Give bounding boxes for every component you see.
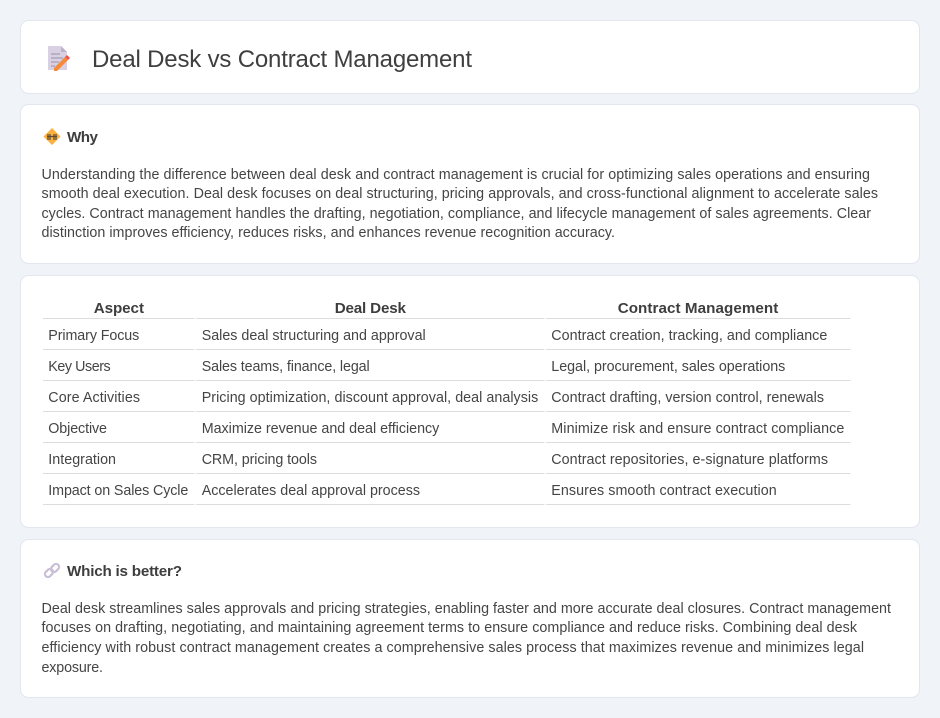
row: integration: Contract repositories, e-signature platforms bbox=[551, 452, 828, 468]
row: impact on sales cycle: Impact on Sales Cycle bbox=[48, 483, 188, 499]
row: key users: Key Users bbox=[48, 359, 111, 375]
row: integration bbox=[48, 452, 828, 468]
heading: why: Why bbox=[67, 129, 99, 146]
row: key users bbox=[48, 359, 785, 375]
row: key users: Sales teams, finance, legal bbox=[202, 359, 370, 375]
text block: verdict bbox=[42, 601, 891, 676]
row: core activities: Contract drafting, version control, renewals bbox=[551, 390, 824, 406]
table header: Aspect bbox=[94, 300, 144, 317]
text block: why explanation: Understanding the difference between deal desk and contract management is crucial for optimizing sales operations and ensuring bbox=[42, 167, 870, 183]
row: impact on sales cycle: Accelerates deal approval process bbox=[202, 483, 420, 499]
panel: comparison table bbox=[20, 276, 920, 528]
text block: verdict: efficiency with robust contract management creates a comprehensive sales process that maximizes revenue and minimizes legal bbox=[42, 640, 864, 656]
icon: warning diamond bbox=[44, 128, 60, 145]
table header: Contract Management bbox=[618, 300, 778, 317]
panel: why bbox=[20, 104, 920, 264]
text block: verdict: focuses on drafting, negotiating, and maintaining agreement terms to ensure compliance and reduce risks. Combining deal desk bbox=[42, 620, 858, 636]
row: objective: Maximize revenue and deal efficiency bbox=[202, 421, 440, 437]
icon: memo with pencil bbox=[48, 46, 70, 71]
row: impact on sales cycle bbox=[48, 483, 777, 499]
icon: link bbox=[44, 563, 60, 578]
panel: header bbox=[20, 20, 920, 94]
table header bbox=[94, 300, 778, 317]
text block: verdict: Deal desk streamlines sales approvals and pricing strategies, enabling faster and more accurate deal closures. Contract management bbox=[42, 601, 891, 617]
row: key users: Legal, procurement, sales operations bbox=[551, 359, 785, 375]
row: core activities: Pricing optimization, discount approval, deal analysis bbox=[202, 390, 538, 406]
table header: Deal Desk bbox=[335, 300, 407, 317]
text block: why explanation: cycles. Contract management handles the drafting, negotiation, compliance, and lifecycle management of sales agreements. Clear bbox=[42, 206, 871, 222]
row: impact on sales cycle: Ensures smooth contract execution bbox=[551, 483, 777, 499]
row: integration: CRM, pricing tools bbox=[202, 452, 317, 468]
row: primary focus: Contract creation, tracking, and compliance bbox=[551, 328, 827, 344]
row: objective: Minimize risk and ensure contract compliance bbox=[551, 421, 844, 437]
row: objective: Objective bbox=[48, 421, 107, 437]
row: primary focus bbox=[48, 328, 827, 344]
row: core activities bbox=[48, 390, 824, 406]
text block: why explanation bbox=[42, 167, 878, 241]
row: primary focus: Primary Focus bbox=[48, 328, 139, 344]
row: primary focus: Sales deal structuring and approval bbox=[202, 328, 426, 344]
text block: why explanation: distinction improves efficiency, reduces risks, and enhances revenue recognition accuracy. bbox=[42, 225, 615, 241]
title: Deal Desk vs Contract Management bbox=[92, 46, 472, 73]
text block: why explanation: smooth deal execution. Deal desk focuses on deal structuring, pricing approvals, and cross-functional alignment to accelerate sales bbox=[42, 186, 878, 202]
row: integration: Integration bbox=[48, 452, 116, 468]
heading: which is better: Which is better? bbox=[67, 563, 182, 580]
text block: verdict: exposure. bbox=[42, 660, 103, 676]
row: core activities: Core Activities bbox=[48, 390, 140, 406]
row: objective bbox=[48, 421, 844, 437]
panel: which is better bbox=[20, 540, 920, 698]
